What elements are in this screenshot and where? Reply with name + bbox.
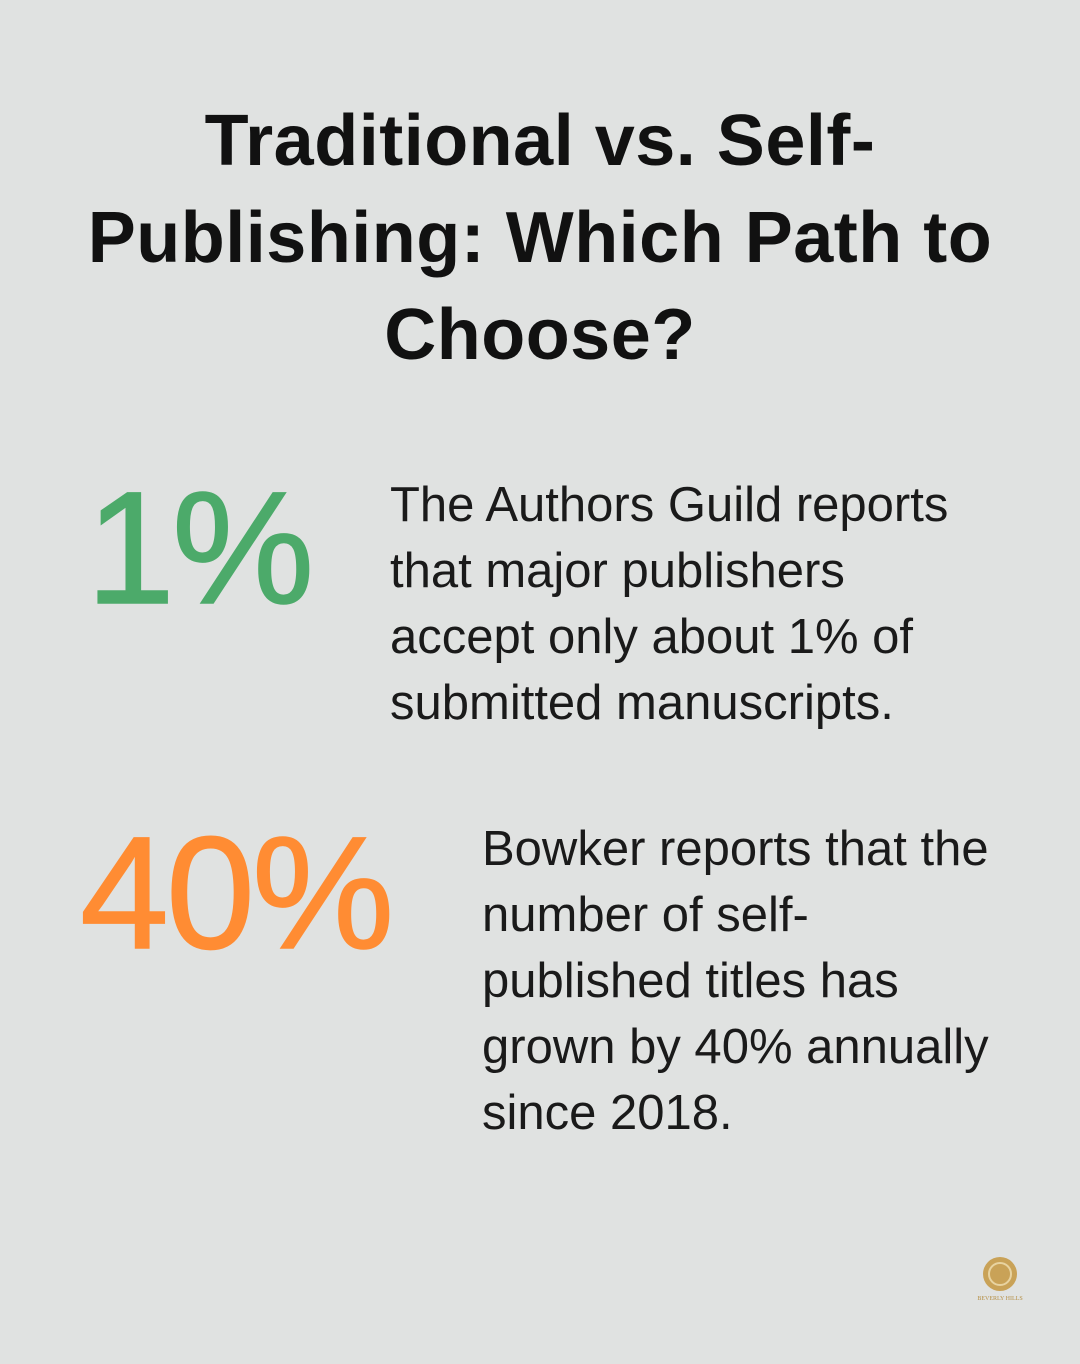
text: bowker: published titles has bbox=[482, 954, 899, 1008]
text: bowker bbox=[482, 822, 989, 1140]
text: bowker: number of self- bbox=[482, 888, 809, 942]
text: authors guild: accept only about 1% of bbox=[390, 610, 913, 664]
logo: BEVERLY HILLS bbox=[977, 1296, 1023, 1302]
text: authors guild bbox=[390, 478, 948, 730]
text: authors guild: submitted manuscripts. bbox=[390, 676, 894, 730]
text: authors guild: The Authors Guild reports bbox=[390, 478, 948, 532]
text: bowker: Bowker reports that the bbox=[482, 822, 989, 876]
title bbox=[88, 101, 992, 375]
logo bbox=[977, 1257, 1023, 1302]
text: authors guild: that major publishers bbox=[390, 544, 845, 598]
text: bowker: grown by 40% annually bbox=[482, 1020, 989, 1074]
stat: 1%: 1% bbox=[86, 458, 311, 637]
title: Publishing: Which Path to bbox=[88, 198, 992, 278]
text: bowker: since 2018. bbox=[482, 1086, 733, 1140]
title: Traditional vs. Self- bbox=[205, 101, 875, 181]
stat: 40%: 40% bbox=[80, 803, 391, 982]
title: Choose? bbox=[384, 295, 696, 375]
